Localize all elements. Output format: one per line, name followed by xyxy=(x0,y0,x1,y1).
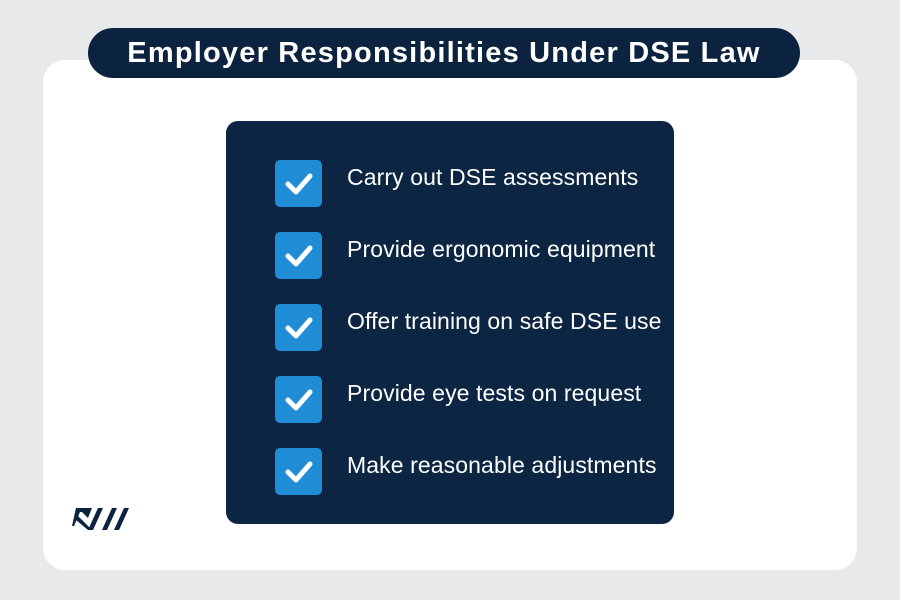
item 3: Offer training on safe DSE use xyxy=(347,308,662,334)
item 5: Make reasonable adjustments xyxy=(347,452,657,478)
item 3 xyxy=(275,304,662,351)
item 1: Carry out DSE assessments xyxy=(347,164,638,190)
title xyxy=(88,28,800,78)
item 4 xyxy=(275,376,641,423)
item 2: Provide ergonomic equipment xyxy=(347,236,655,262)
background card xyxy=(43,60,857,570)
title: Employer Responsibilities Under DSE Law xyxy=(127,37,761,69)
item 1 xyxy=(275,160,638,207)
item 5 xyxy=(275,448,657,495)
item 4: Provide eye tests on request xyxy=(347,380,641,406)
item 2 xyxy=(275,232,655,279)
panel: checklist xyxy=(226,121,674,524)
icon: logo xyxy=(72,508,129,530)
